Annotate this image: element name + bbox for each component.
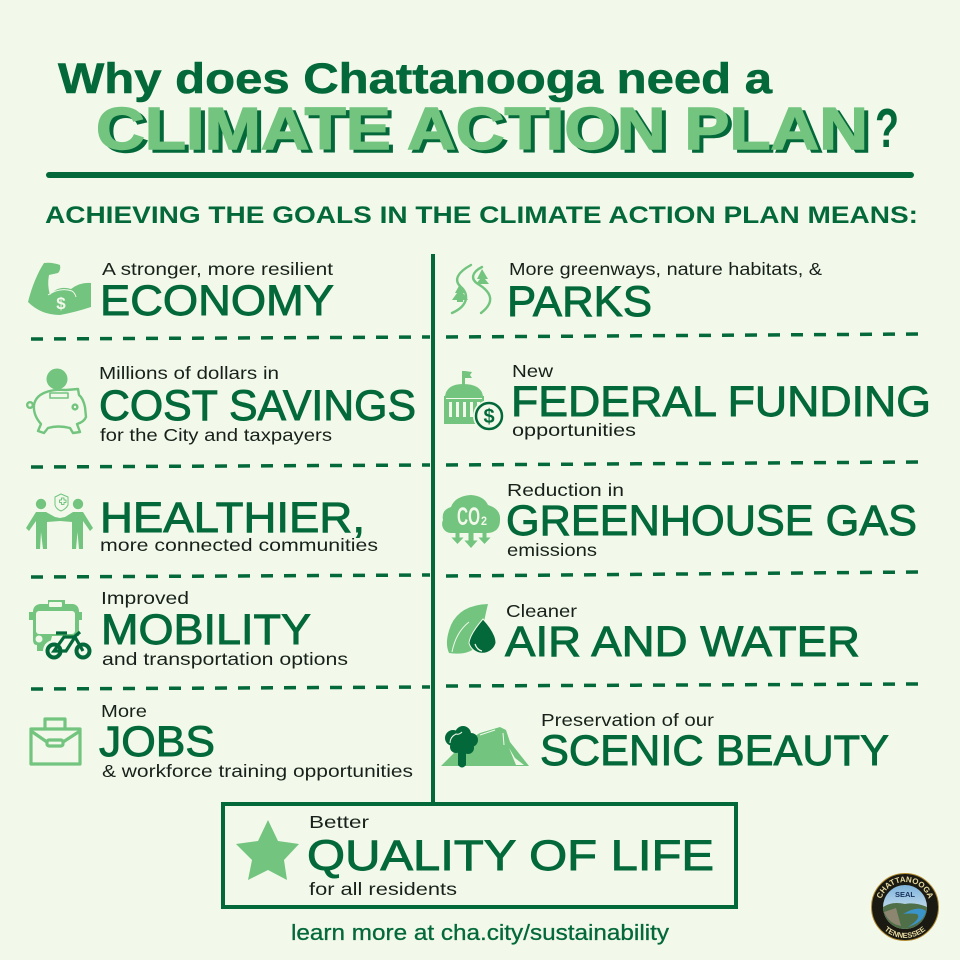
panel: cost savings: COST SAVINGS bbox=[99, 383, 416, 430]
panel: greenhouse gas bbox=[442, 480, 917, 560]
icon: city seal: TENNESSEE bbox=[886, 926, 926, 938]
panel: air and water: AIR AND WATER bbox=[505, 619, 860, 666]
icon: bus and bicycle bbox=[29, 600, 93, 662]
panel: jobs: JOBS bbox=[99, 719, 215, 766]
panel: parks bbox=[452, 259, 822, 326]
icon: leaf and water drop bbox=[447, 604, 496, 654]
panel: healthier: HEALTHIER, bbox=[100, 495, 365, 542]
panel: mobility: MOBILITY bbox=[101, 607, 311, 654]
panel: greenhouse gas: GREENHOUSE GAS bbox=[506, 498, 917, 545]
panel: scenic beauty: Preservation of our bbox=[541, 710, 714, 730]
panel: cost savings: Millions of dollars in bbox=[99, 363, 279, 383]
title: CLIMATE ACTION PLAN bbox=[96, 96, 868, 162]
icon: piggy bank and coin bbox=[27, 368, 86, 433]
panel: jobs: More bbox=[101, 701, 147, 721]
panel: quality of life: QUALITY OF LIFE bbox=[307, 833, 714, 880]
panel: quality of life: Better bbox=[309, 812, 369, 832]
panel: cost savings bbox=[27, 363, 416, 445]
panel: economy: A stronger, more resilient bbox=[102, 259, 333, 279]
title: ? bbox=[875, 97, 899, 159]
icon: city seal: CHATTANOOGA bbox=[877, 876, 933, 899]
panel: economy: ECONOMY bbox=[100, 278, 334, 325]
icon: flexed arm with dollar bbox=[28, 263, 91, 315]
panel: quality of life: for all residents bbox=[309, 879, 457, 899]
panel: greenhouse gas: Reduction in bbox=[507, 480, 624, 500]
icon: CO2 cloud with down arrows: 2 bbox=[481, 514, 487, 528]
icon: flexed arm with dollar: $ bbox=[56, 294, 66, 313]
panel: federal funding: FEDERAL FUNDING bbox=[511, 379, 931, 426]
panel: federal funding: New bbox=[512, 361, 553, 381]
panel: healthier bbox=[26, 494, 378, 555]
panel: scenic beauty bbox=[441, 710, 889, 775]
icon: star bbox=[236, 820, 299, 880]
icon: CO2 cloud with down arrows: CO bbox=[457, 503, 480, 531]
icon: capitol with dollar coin: $ bbox=[483, 406, 495, 428]
panel: mobility: and transportation options bbox=[102, 649, 348, 669]
panel: economy bbox=[28, 259, 334, 325]
panel: federal funding bbox=[444, 361, 931, 440]
icon: city seal: SEAL bbox=[895, 890, 915, 899]
title bbox=[58, 55, 899, 165]
panel: mobility: Improved bbox=[101, 588, 189, 608]
panel: jobs bbox=[31, 701, 413, 781]
title: CLIMATE ACTION PLAN bbox=[100, 99, 872, 165]
icon: tree and mountain bbox=[441, 726, 529, 768]
icon: city seal bbox=[871, 873, 939, 941]
panel: parks: More greenways, nature habitats, & bbox=[509, 259, 822, 279]
icon: briefcase bbox=[31, 719, 80, 764]
footer link text: learn more at cha.city/sustainability bbox=[291, 920, 669, 945]
panel: air and water bbox=[447, 601, 860, 666]
panel: cost savings: for the City and taxpayers bbox=[100, 425, 332, 445]
icon: capitol with dollar coin bbox=[444, 371, 505, 432]
icon: two people and health shield bbox=[26, 494, 93, 549]
panel: air and water: Cleaner bbox=[506, 601, 577, 621]
panel: jobs: & workforce training opportunities bbox=[102, 761, 413, 781]
title: Why does Chattanooga need a bbox=[58, 55, 773, 103]
panel: federal funding: opportunities bbox=[512, 420, 636, 440]
panel: mobility bbox=[29, 588, 348, 669]
icon: winding path with trees bbox=[452, 265, 490, 313]
subtitle: ACHIEVING THE GOALS IN THE CLIMATE ACTION PLAN MEANS: bbox=[45, 202, 918, 229]
panel: scenic beauty: SCENIC BEAUTY bbox=[540, 728, 889, 775]
panel: parks: PARKS bbox=[507, 279, 652, 326]
panel: greenhouse gas: emissions bbox=[507, 540, 597, 560]
panel: quality of life bbox=[223, 804, 736, 907]
icon: CO2 cloud with down arrows bbox=[442, 495, 500, 548]
panel: healthier: more connected communities bbox=[100, 535, 378, 555]
